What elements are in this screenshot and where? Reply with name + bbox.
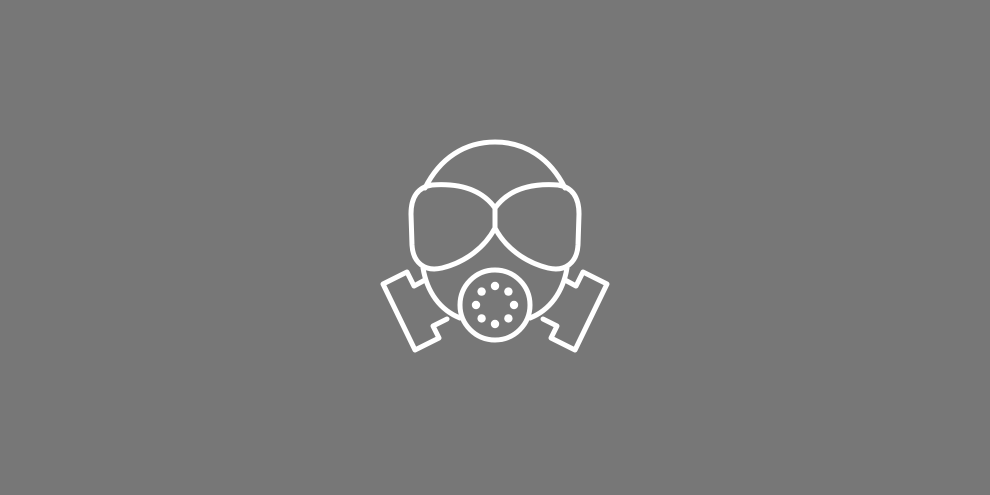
left lens xyxy=(411,185,495,269)
head top arc xyxy=(425,142,565,188)
left cartridge xyxy=(383,272,447,350)
filter xyxy=(460,270,530,340)
lower head right xyxy=(530,268,567,318)
right cartridge xyxy=(543,272,607,350)
lower head left xyxy=(423,268,460,318)
filter holes xyxy=(472,282,518,328)
right lens xyxy=(495,185,579,269)
